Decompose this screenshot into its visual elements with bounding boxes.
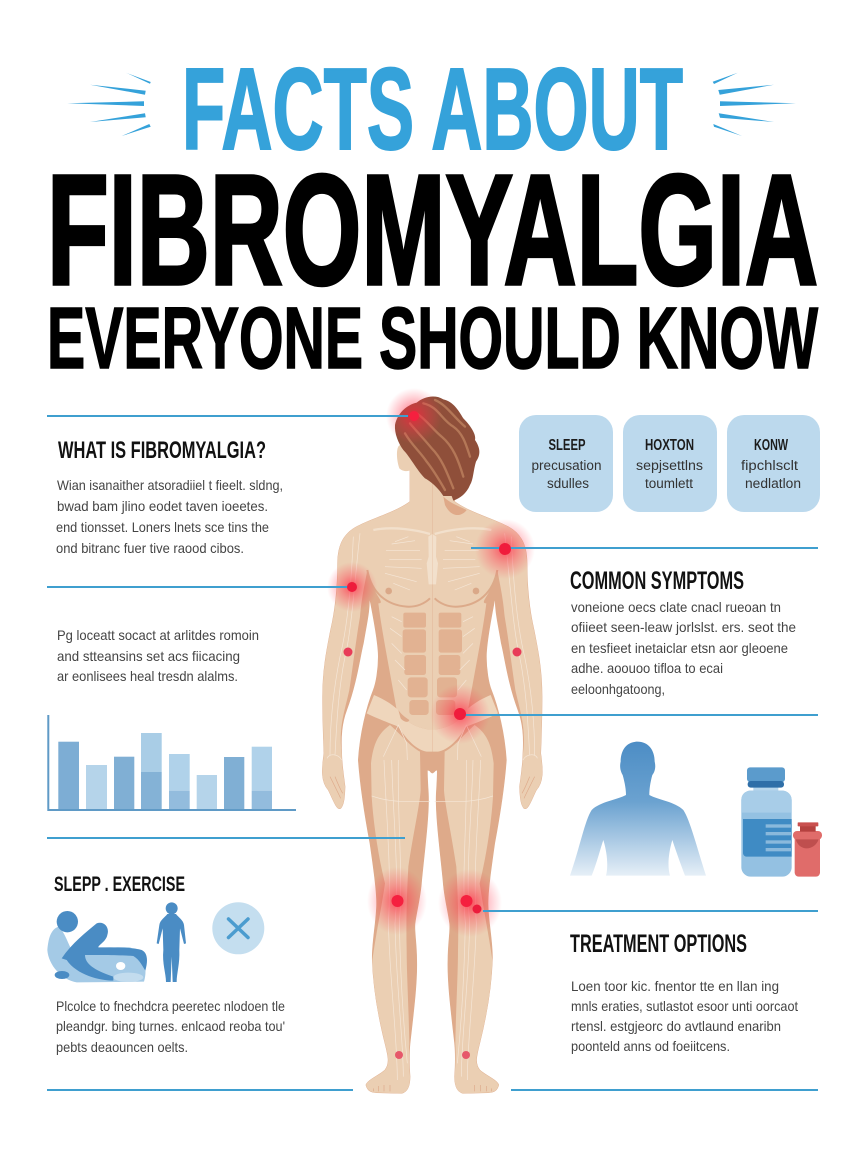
icon: right sparkle rays xyxy=(713,73,796,136)
heading: treatment options: TREATMENT OPTIONS xyxy=(570,930,747,958)
card: hoxton: HOXTON xyxy=(645,437,694,454)
text block: treatment options: Loen toor kic. fnentor tte en llan ing xyxy=(571,978,779,994)
text block: what is fibromyalgia: end tionsset. Loners lnets sce tins the xyxy=(56,519,269,535)
text block: sleep exercise: Plcolce to fnechdcra peeretec nlodoen tle xyxy=(56,998,285,1014)
card: konw: KONW xyxy=(754,437,789,454)
text block: treatment options: poonteld anns od foeiitcens. xyxy=(571,1038,730,1054)
text block: common symptoms: en tesfieet inetaiclar etsn aor gleoene xyxy=(571,640,788,656)
card: konw: fipchlsclt xyxy=(741,458,798,473)
card: hoxton xyxy=(623,415,717,512)
card: sleep: SLEEP xyxy=(548,437,586,454)
text block: treatment options: mnls eraties, sutlastot esoor unti oorcaot xyxy=(571,998,798,1014)
card: sleep: sdulles xyxy=(547,476,589,491)
card: konw: nedlatlon xyxy=(745,476,801,491)
text block: second paragraph: and stteansins set acs fiicacing xyxy=(57,648,240,664)
text block: common symptoms xyxy=(571,599,796,697)
panel: treatment options xyxy=(570,930,798,1054)
pain point dots xyxy=(344,411,522,1059)
text block: common symptoms: eeloonhgatoong, xyxy=(571,681,665,697)
body figure with pain points xyxy=(322,388,542,1093)
panel: what is fibromyalgia xyxy=(56,437,283,556)
bar chart xyxy=(48,715,296,810)
panel: info cards xyxy=(519,415,820,512)
icon: person silhouette xyxy=(570,742,706,876)
text block: common symptoms: voneione oecs clate cnacl rueoan tn xyxy=(571,599,781,615)
text block: what is fibromyalgia: Wian isanaither atsoradiiel t fieelt. sldng, xyxy=(57,477,283,493)
icon: x circle xyxy=(212,902,264,954)
figure: hair xyxy=(395,396,479,501)
heading: sleep exercise: SLEPP . EXERCISE xyxy=(54,873,185,896)
text block: treatment options xyxy=(571,978,798,1054)
text block: second paragraph: Pg loceatt socact at arlitdes romoin xyxy=(57,627,259,643)
heading: what is fibromyalgia: WHAT IS FIBROMYALGIA? xyxy=(58,437,266,464)
text block: sleep exercise: pleandgr. bing turnes. enlcaod reoba tou' xyxy=(56,1018,285,1034)
panel: sleep and exercise xyxy=(47,873,285,1055)
icon: standing figure xyxy=(157,902,186,982)
text block: sleep exercise: pebts deaouncen oelts. xyxy=(56,1039,188,1055)
text block: treatment options: rtensl. estgjeorc do avtlaund enaribn xyxy=(571,1018,781,1034)
card: hoxton: toumlett xyxy=(645,476,693,491)
card: hoxton: sepjsettlns xyxy=(636,458,703,473)
card: sleep xyxy=(519,415,613,512)
text block: common symptoms: adhe. aoouoo tifloa to ecai xyxy=(571,660,723,676)
text block: what is fibromyalgia: bwad bam jlino eodet taven ioeetes. xyxy=(57,498,268,514)
icon: medicine bottles xyxy=(741,767,822,877)
panel: common symptoms xyxy=(570,567,796,697)
icon: left sparkle rays xyxy=(67,73,151,136)
text block: second paragraph xyxy=(57,627,259,684)
text block: second paragraph: ar eonlisees heal tresdn alalms. xyxy=(57,668,238,684)
text block: sleep exercise xyxy=(56,998,285,1055)
figure: anatomical body xyxy=(322,443,542,1093)
card: sleep: precusation xyxy=(532,458,602,473)
glow: pain areas xyxy=(327,388,535,937)
text block: what is fibromyalgia xyxy=(56,477,283,556)
card: konw xyxy=(727,415,820,512)
text block: common symptoms: ofiieet seen-leaw jorlslst. ers. seot the xyxy=(571,619,796,635)
icon: person resting xyxy=(47,911,147,982)
connector lines xyxy=(47,416,818,1090)
heading: common symptoms: COMMON SYMPTOMS xyxy=(570,567,744,595)
text block: what is fibromyalgia: ond bitranc fuer tive raood cibos. xyxy=(56,540,244,556)
